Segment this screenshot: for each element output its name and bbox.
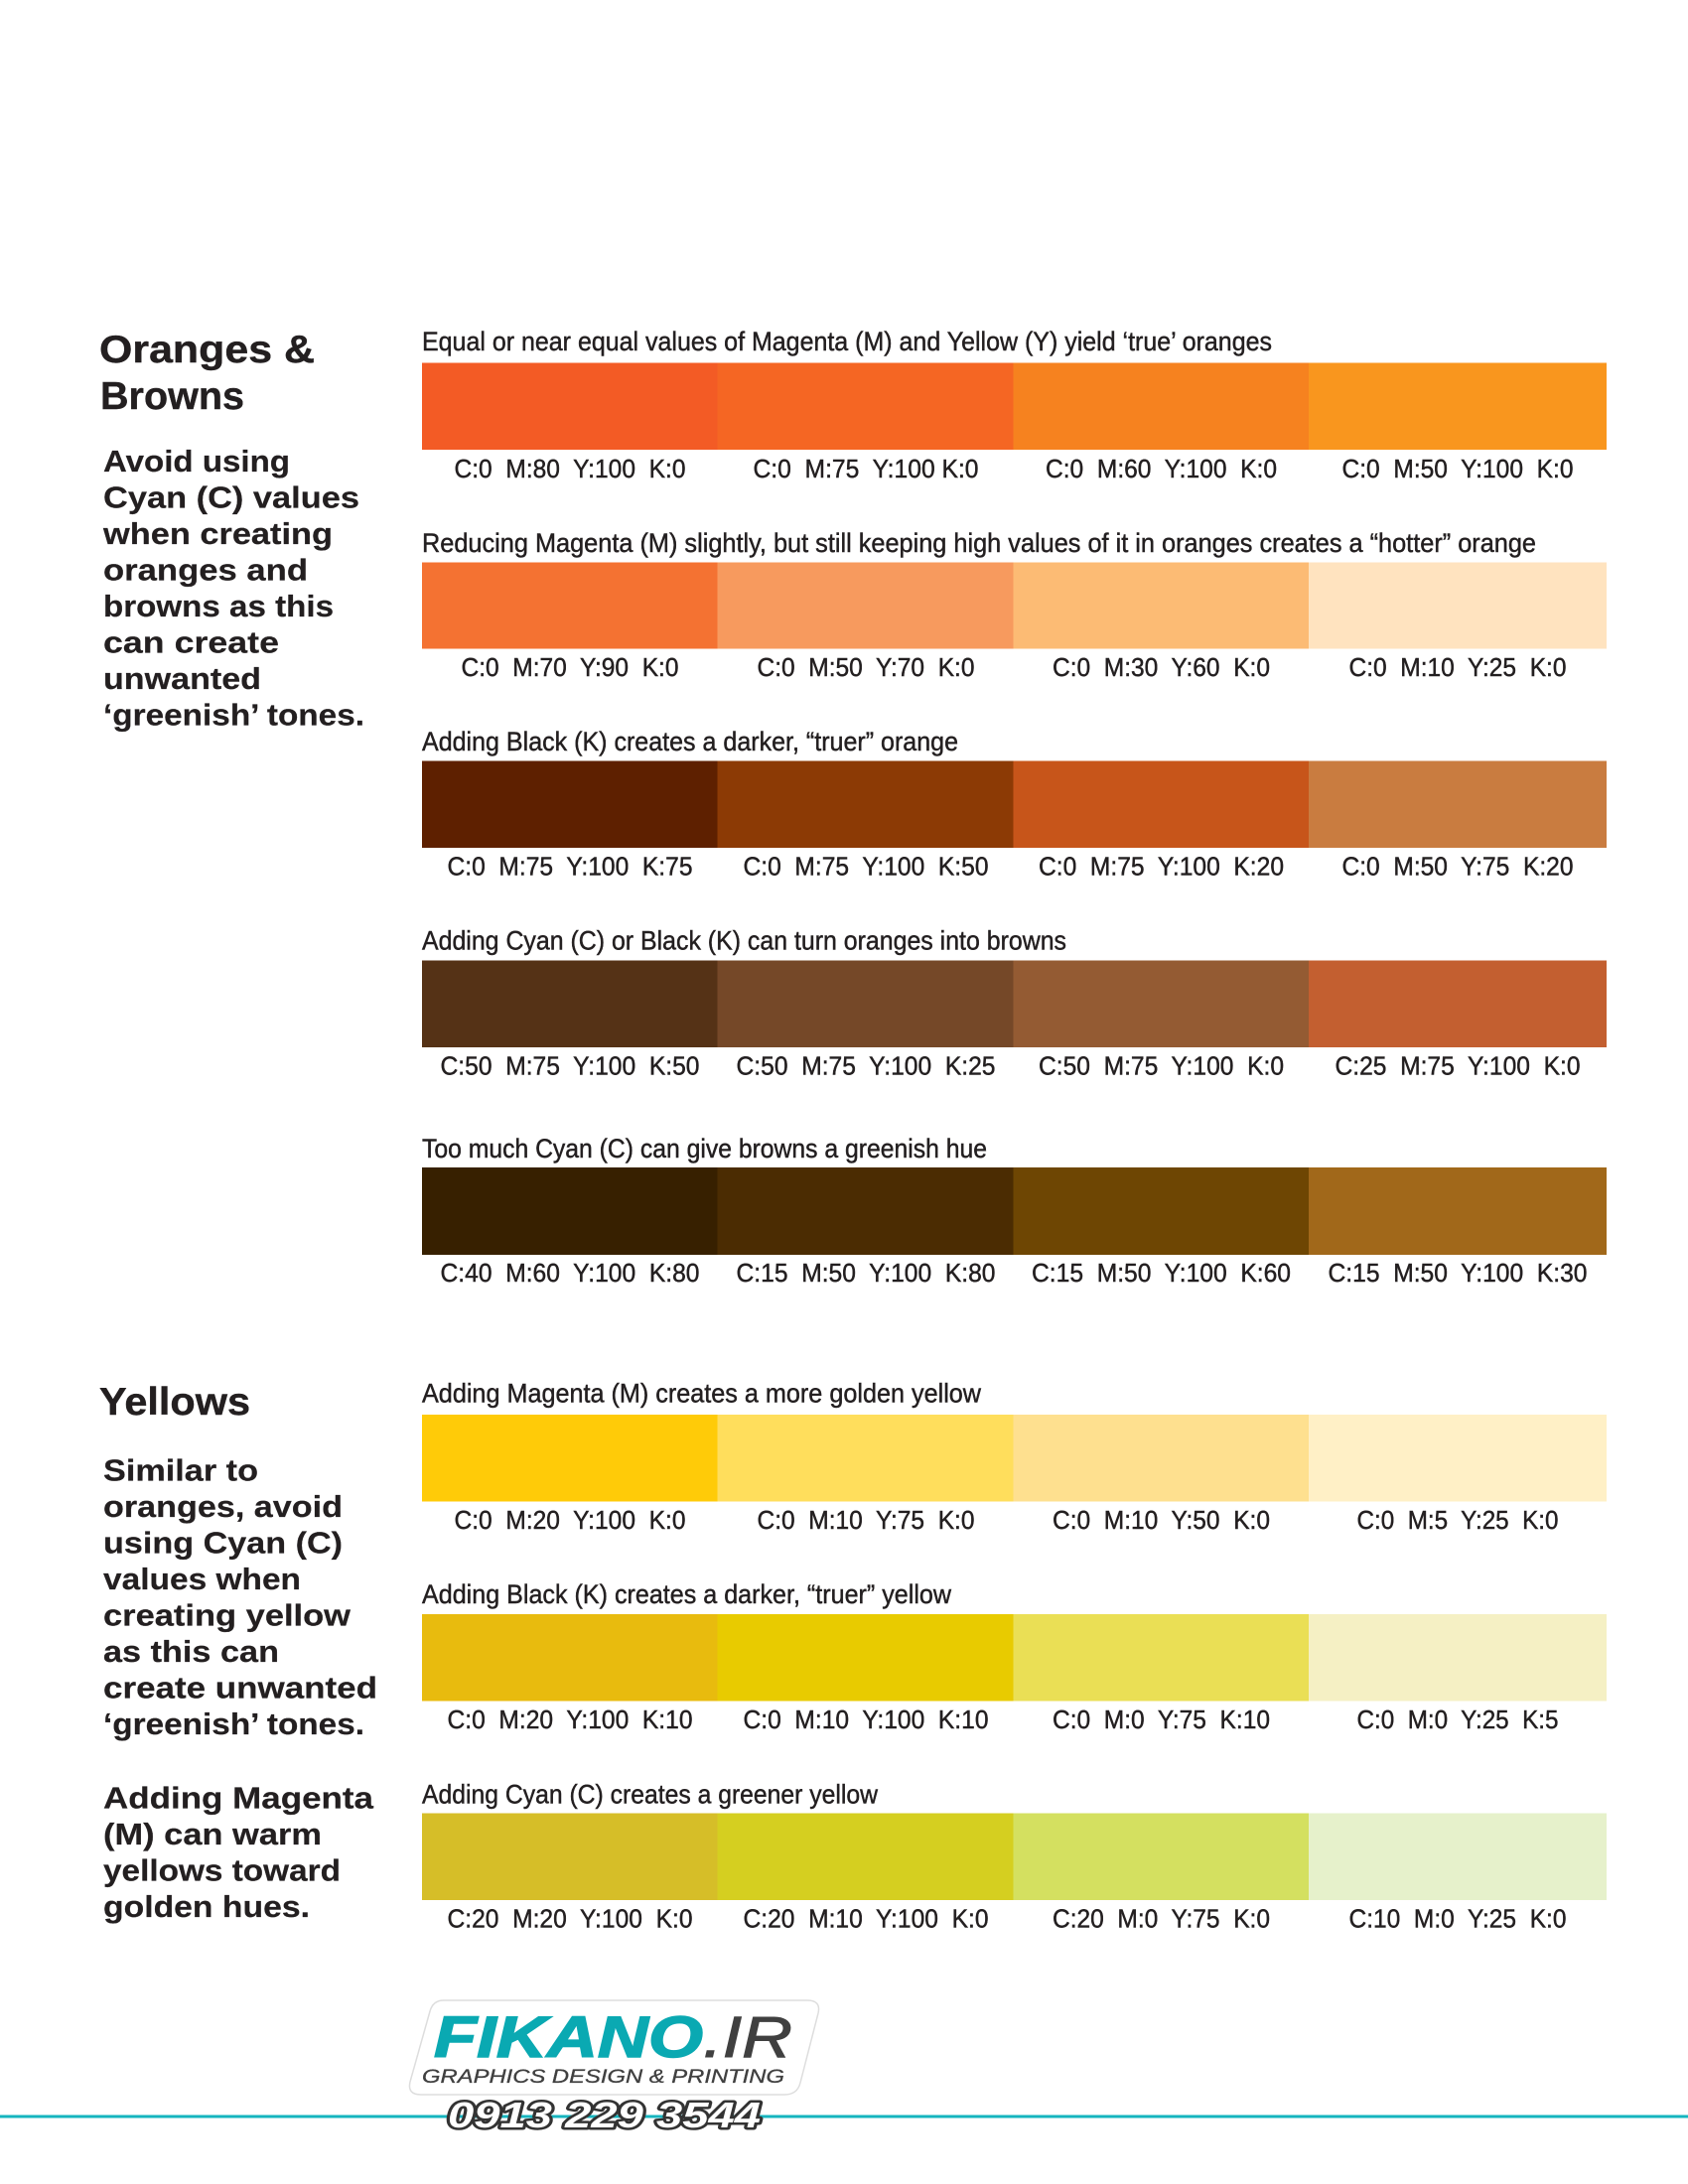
- heading: Oranges & Browns: Browns: [100, 375, 244, 418]
- caption: Adding Black (K) creates a darker, “truer” orange: [422, 727, 958, 756]
- swatch C0 M50 Y100 K0: C:0 M:50 Y:100 K:0: [1342, 456, 1573, 483]
- swatch C0 M0 Y75 K10: C:0 M:0 Y:75 K:10: [1053, 1706, 1270, 1734]
- footer line: [0, 2115, 1688, 2118]
- swatch C0 M0 Y75 K10: [1013, 1614, 1309, 1734]
- swatch C20 M10 Y100 K0: C:20 M:10 Y:100 K:0: [743, 1906, 989, 1934]
- caption: Adding Cyan (C) creates a greener yellow: [422, 1779, 879, 1809]
- logo: FIKANO.IR: [409, 2000, 819, 2135]
- swatch row 7: truer yellow with black: [422, 1579, 1607, 1734]
- logo badge: [409, 2000, 819, 2095]
- text block: avoid cyan in yellows: Similar to: [103, 1453, 258, 1487]
- swatch C0 M75 Y100 K20: C:0 M:75 Y:100 K:20: [1039, 854, 1284, 882]
- swatch C0 M70 Y90 K0: [422, 562, 717, 682]
- swatch row 5: greenish browns: [422, 1134, 1607, 1288]
- caption: Adding Black (K) creates a darker, “truer” yellow: [422, 1579, 952, 1609]
- swatch C50 M75 Y100 K0: C:50 M:75 Y:100 K:0: [1039, 1052, 1284, 1080]
- caption: Adding Cyan (C) or Black (K) can turn oranges into browns: [422, 925, 1066, 955]
- swatch C15 M50 Y100 K30: [1309, 1167, 1607, 1288]
- swatch C20 M0 Y75 K0: C:20 M:0 Y:75 K:0: [1053, 1906, 1270, 1934]
- swatch C50 M75 Y100 K25: [717, 961, 1013, 1080]
- swatch C15 M50 Y100 K80: C:15 M:50 Y:100 K:80: [737, 1260, 995, 1288]
- swatch C0 M10 Y50 K0: C:0 M:10 Y:50 K:0: [1053, 1507, 1270, 1535]
- swatch C50 M75 Y100 K50: [422, 961, 717, 1080]
- logo wordmark: .IR: [703, 2005, 792, 2070]
- swatch C0 M80 Y100 K0: [422, 363, 717, 483]
- text block: avoid cyan in oranges: can create: [103, 625, 279, 659]
- caption: Too much Cyan (C) can give browns a greenish hue: [422, 1134, 987, 1163]
- swatch row 3: truer orange with black: [422, 727, 1607, 882]
- text block: avoid cyan in yellows: [103, 1453, 377, 1741]
- heading: Oranges & Browns: Oranges &: [99, 329, 315, 371]
- swatch row 6: golden yellows: [422, 1378, 1607, 1535]
- swatch C15 M50 Y100 K30: C:15 M:50 Y:100 K:30: [1329, 1260, 1587, 1288]
- text block: avoid cyan in yellows: using Cyan (C): [103, 1525, 343, 1561]
- swatch C0 M5 Y25 K0: [1309, 1415, 1607, 1535]
- text block: avoid cyan in oranges: Cyan (C) values: [103, 480, 359, 514]
- swatch C0 M10 Y75 K0: C:0 M:10 Y:75 K:0: [757, 1507, 975, 1535]
- swatch C0 M0 Y25 K5: [1309, 1614, 1607, 1734]
- swatch C20 M20 Y100 K0: [422, 1813, 717, 1934]
- swatch C20 M20 Y100 K0: C:20 M:20 Y:100 K:0: [447, 1906, 693, 1934]
- panel: oranges and browns sidebar: [99, 329, 364, 733]
- text block: avoid cyan in oranges: unwanted: [103, 661, 261, 696]
- swatch C0 M30 Y60 K0: [1013, 562, 1309, 682]
- swatch C0 M30 Y60 K0: C:0 M:30 Y:60 K:0: [1053, 654, 1270, 682]
- logo phone number: 0913 229 3544: [448, 2095, 761, 2135]
- swatch C50 M75 Y100 K0: [1013, 961, 1309, 1080]
- swatch C0 M10 Y75 K0: [717, 1415, 1013, 1535]
- text block: avoid cyan in oranges: oranges and: [103, 552, 308, 588]
- swatch C0 M0 Y25 K5: C:0 M:0 Y:25 K:5: [1356, 1706, 1559, 1734]
- text block: magenta warms yellows: golden hues.: [103, 1889, 310, 1924]
- swatch C0 M50 Y70 K0: [717, 562, 1013, 682]
- swatch C0 M10 Y50 K0: [1013, 1415, 1309, 1535]
- text block: avoid cyan in oranges: ‘greenish’ tones.: [103, 697, 364, 733]
- swatch C0 M75 Y100 K75: C:0 M:75 Y:100 K:75: [447, 854, 693, 882]
- swatch C20 M10 Y100 K0: [717, 1813, 1013, 1934]
- swatch C25 M75 Y100 K0: [1309, 961, 1607, 1080]
- swatch C20 M0 Y75 K0: [1013, 1813, 1309, 1934]
- swatch C0 M10 Y25 K0: [1309, 562, 1607, 682]
- swatch C10 M0 Y25 K0: C:10 M:0 Y:25 K:0: [1348, 1906, 1567, 1934]
- swatch C15 M50 Y100 K80: [717, 1167, 1013, 1288]
- text block: avoid cyan in yellows: as this can: [103, 1634, 279, 1669]
- swatch C0 M75 Y100 K75: [422, 760, 717, 882]
- swatch C0 M20 Y100 K0: C:0 M:20 Y:100 K:0: [455, 1507, 685, 1535]
- swatch row 1: true oranges: [422, 327, 1607, 483]
- swatch C25 M75 Y100 K0: C:25 M:75 Y:100 K:0: [1335, 1052, 1581, 1080]
- caption: Equal or near equal values of Magenta (M) and Yellow (Y) yield ‘true’ oranges: [422, 327, 1272, 356]
- logo tagline: GRAPHICS DESIGN & PRINTING: [422, 2067, 784, 2088]
- swatch C0 M20 Y100 K10: [422, 1614, 717, 1734]
- text block: magenta warms yellows: [103, 1781, 374, 1924]
- swatch C0 M10 Y100 K10: C:0 M:10 Y:100 K:10: [743, 1706, 989, 1734]
- text block: avoid cyan in yellows: ‘greenish’ tones.: [103, 1706, 364, 1741]
- logo wordmark: [434, 2005, 792, 2070]
- swatch C0 M70 Y90 K0: C:0 M:70 Y:90 K:0: [461, 654, 679, 682]
- swatch C15 M50 Y100 K60: [1013, 1167, 1309, 1288]
- text block: magenta warms yellows: yellows toward: [103, 1852, 341, 1888]
- text block: avoid cyan in yellows: values when: [103, 1562, 301, 1596]
- text block: avoid cyan in oranges: browns as this: [103, 589, 334, 623]
- swatch C40 M60 Y100 K80: C:40 M:60 Y:100 K:80: [441, 1260, 699, 1288]
- swatch C15 M50 Y100 K60: C:15 M:50 Y:100 K:60: [1032, 1260, 1291, 1288]
- text block: magenta warms yellows: (M) can warm: [103, 1817, 322, 1851]
- swatch C0 M50 Y100 K0: [1309, 363, 1607, 483]
- swatch C0 M10 Y100 K10: [717, 1614, 1013, 1734]
- text block: avoid cyan in oranges: [102, 444, 364, 733]
- swatch C0 M10 Y25 K0: C:0 M:10 Y:25 K:0: [1348, 654, 1567, 682]
- swatch row 2: hotter oranges: [422, 528, 1607, 682]
- swatch C0 M80 Y100 K0: C:0 M:80 Y:100 K:0: [455, 456, 685, 483]
- swatch C0 M75 Y100 K0: C:0 M:75 Y:100 K:0: [753, 456, 979, 483]
- swatch row 4: oranges into browns: [422, 925, 1607, 1080]
- swatch C0 M20 Y100 K0: [422, 1415, 717, 1535]
- text block: avoid cyan in oranges: Avoid using: [103, 444, 290, 478]
- swatch row 8: greener yellows: [422, 1779, 1607, 1934]
- text block: avoid cyan in yellows: create unwanted: [103, 1670, 377, 1706]
- swatch C10 M0 Y25 K0: [1309, 1813, 1607, 1934]
- text block: avoid cyan in yellows: oranges, avoid: [103, 1489, 343, 1524]
- text block: avoid cyan in yellows: creating yellow: [103, 1598, 352, 1632]
- swatch C0 M75 Y100 K20: [1013, 760, 1309, 882]
- swatch C0 M5 Y25 K0: C:0 M:5 Y:25 K:0: [1356, 1507, 1559, 1535]
- swatch C0 M50 Y75 K20: [1309, 760, 1607, 882]
- logo wordmark: FIKANO: [434, 2005, 703, 2070]
- swatch C50 M75 Y100 K50: C:50 M:75 Y:100 K:50: [441, 1052, 699, 1080]
- swatch C0 M60 Y100 K0: [1013, 363, 1309, 483]
- text block: magenta warms yellows: Adding Magenta: [103, 1781, 374, 1815]
- swatch C40 M60 Y100 K80: [422, 1167, 717, 1288]
- text block: avoid cyan in oranges: when creating: [102, 516, 333, 551]
- swatch C0 M50 Y75 K20: C:0 M:50 Y:75 K:20: [1342, 854, 1573, 882]
- swatch C50 M75 Y100 K25: C:50 M:75 Y:100 K:25: [737, 1052, 995, 1080]
- swatch C0 M20 Y100 K10: C:0 M:20 Y:100 K:10: [447, 1706, 693, 1734]
- heading: Oranges & Browns: [99, 329, 315, 418]
- swatch C0 M50 Y70 K0: C:0 M:50 Y:70 K:0: [757, 654, 975, 682]
- heading: Yellows: Yellows: [99, 1381, 250, 1424]
- swatch C0 M75 Y100 K50: C:0 M:75 Y:100 K:50: [743, 854, 989, 882]
- caption: Adding Magenta (M) creates a more golden yellow: [422, 1378, 982, 1408]
- caption: Reducing Magenta (M) slightly, but still keeping high values of it in oranges creates a “hotter” orange: [422, 528, 1536, 558]
- swatch C0 M60 Y100 K0: C:0 M:60 Y:100 K:0: [1046, 456, 1277, 483]
- swatch C0 M75 Y100 K0: [717, 363, 1013, 483]
- swatch C0 M75 Y100 K50: [717, 760, 1013, 882]
- panel: yellows sidebar: [99, 1381, 377, 1924]
